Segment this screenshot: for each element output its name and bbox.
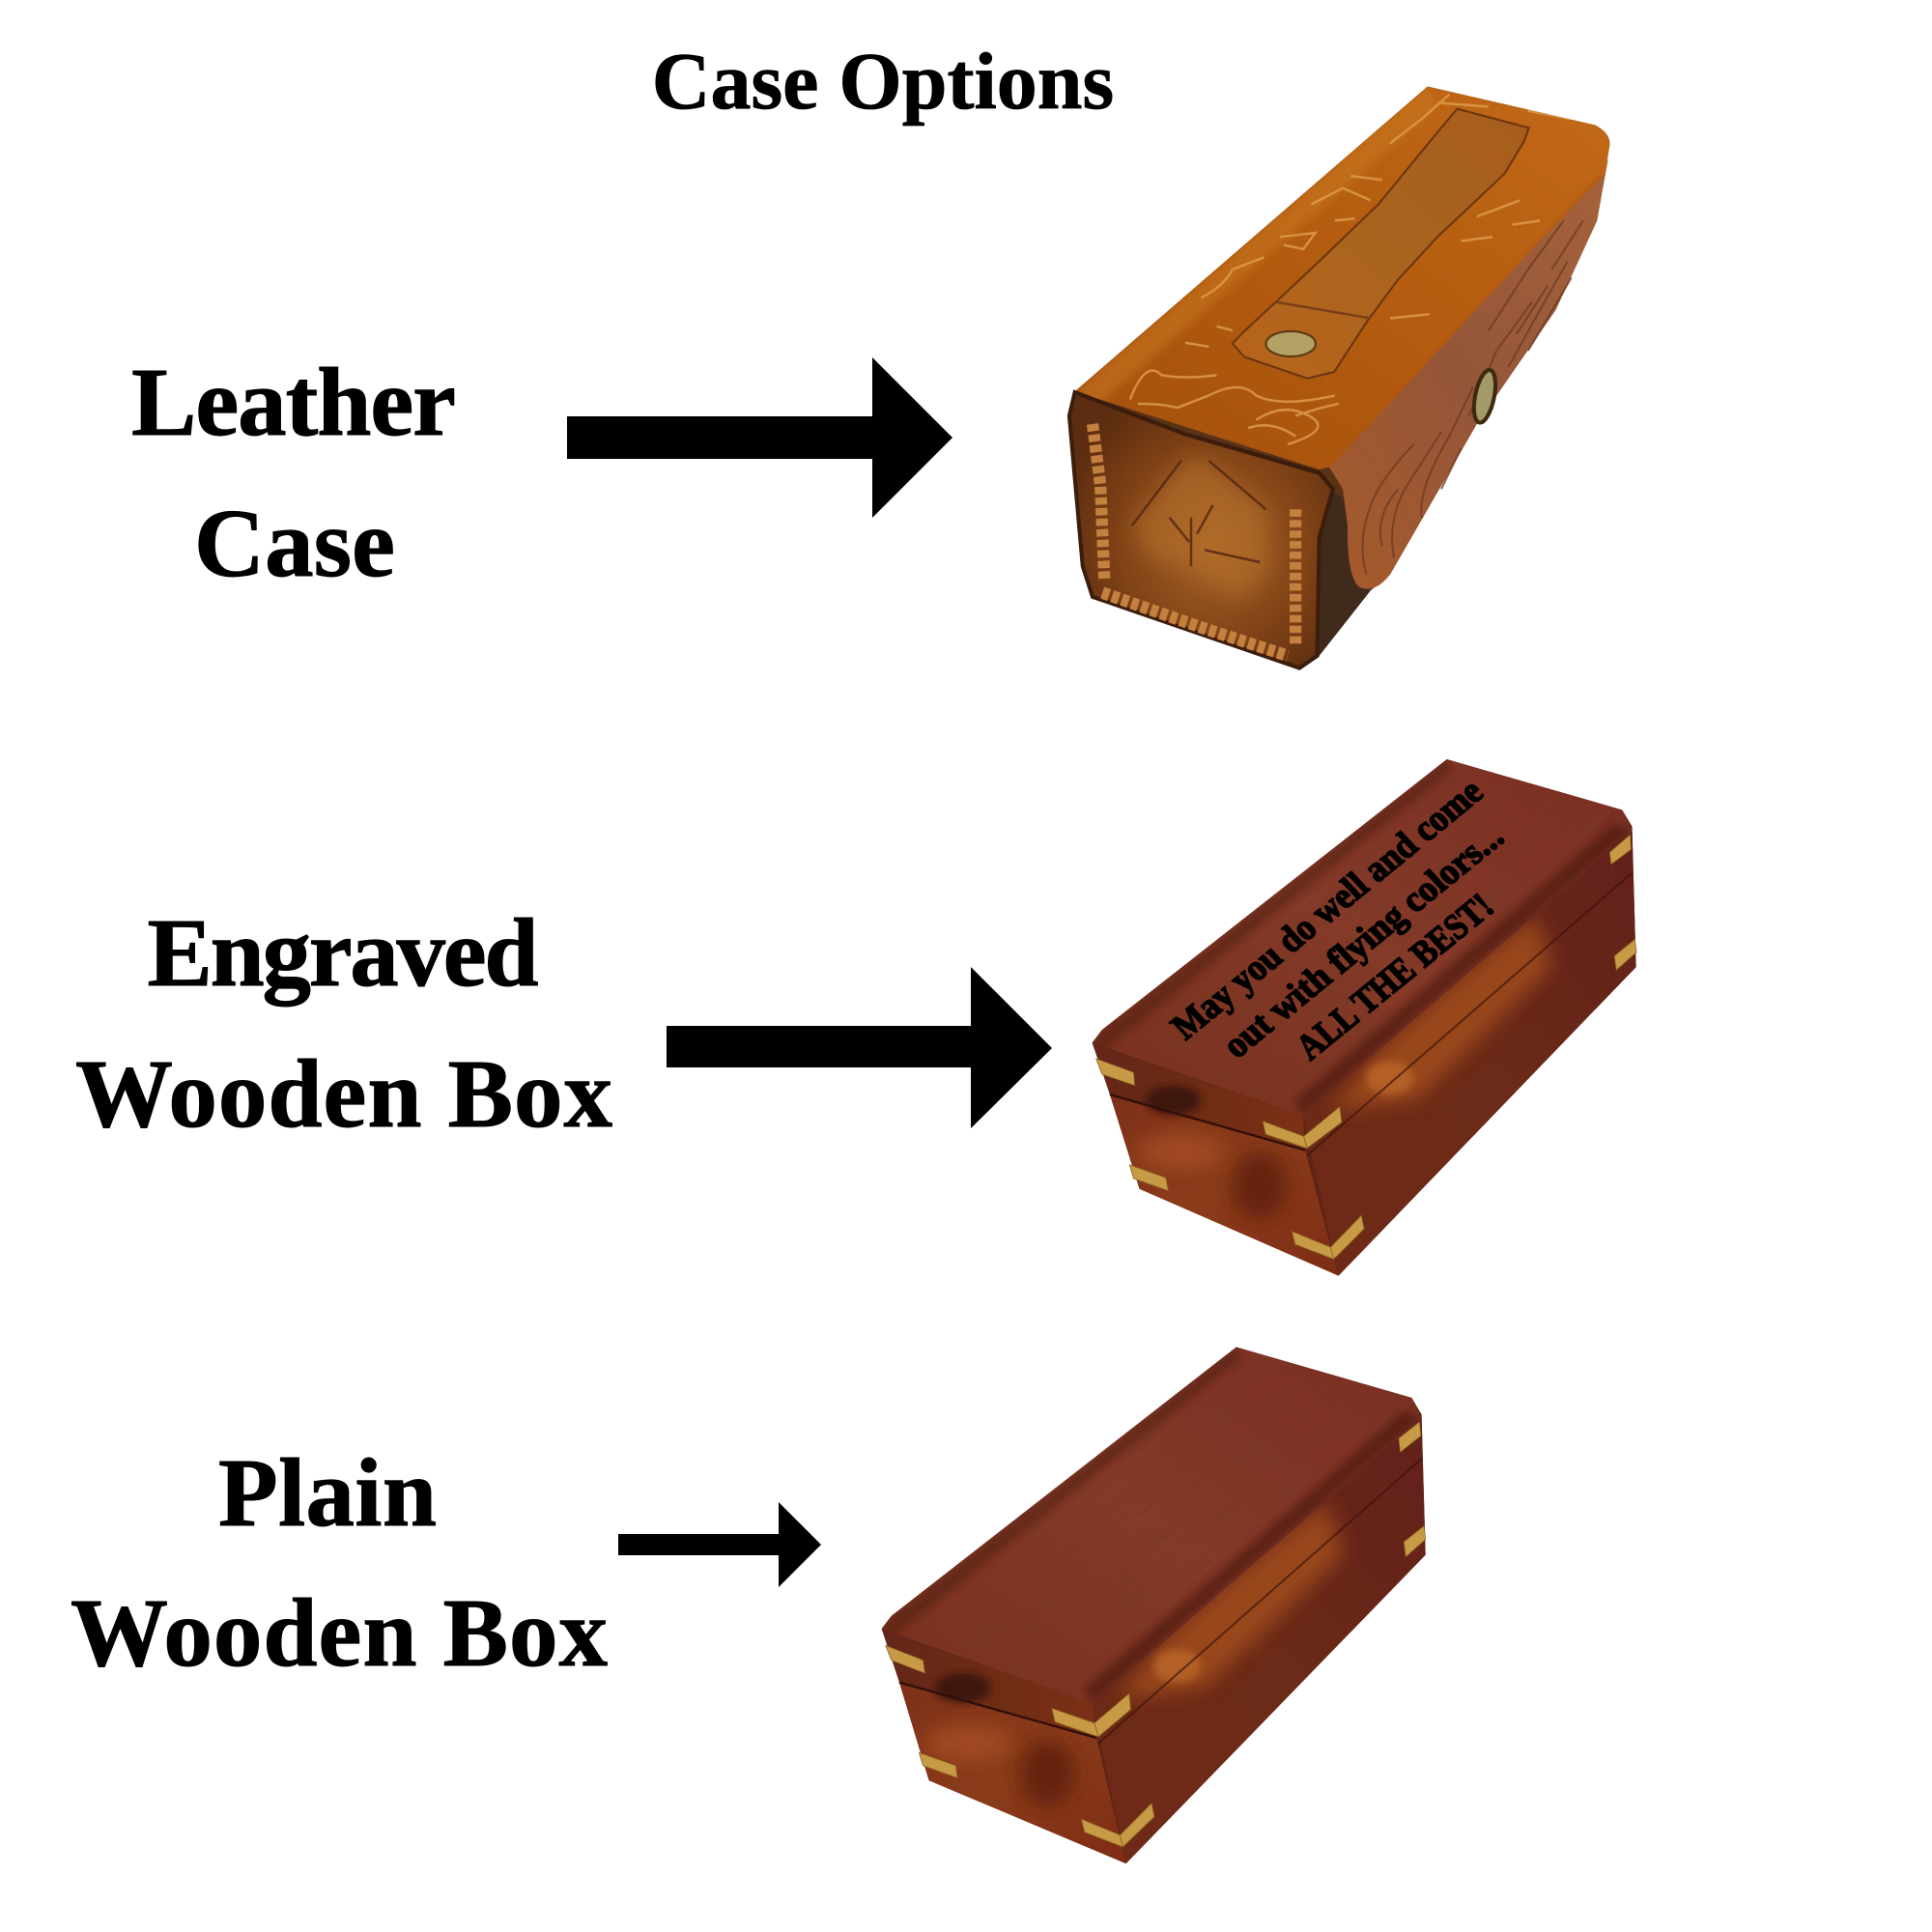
leather strap xyxy=(1233,109,1529,379)
label: plain wooden box: Wooden Box xyxy=(71,1578,608,1687)
side flap engraving xyxy=(1362,220,1583,575)
leather front face xyxy=(1069,392,1333,668)
engraved message: ALL THE BEST! xyxy=(1288,886,1502,1067)
side rivet xyxy=(1470,368,1499,425)
image: plain wooden box xyxy=(881,1347,1426,1864)
box silhouette backing xyxy=(1093,759,1636,1276)
top face shading and emboss xyxy=(1075,86,1606,472)
label: leather case: Leather xyxy=(131,348,456,456)
leather underside xyxy=(1299,477,1371,668)
box lid top xyxy=(882,1348,1422,1703)
box silhouette backing xyxy=(882,1348,1426,1863)
engraved message: out with flying colors... xyxy=(1214,816,1512,1065)
image: engraved wooden box xyxy=(1092,759,1636,1276)
image: leather case xyxy=(1069,86,1609,668)
front face tree emblem xyxy=(1132,461,1268,599)
brass corners xyxy=(1096,835,1636,1259)
strap rivet xyxy=(1266,331,1316,356)
brass corners xyxy=(886,1422,1426,1847)
engraved message: May you do well and come xyxy=(1163,771,1491,1047)
box front xyxy=(1110,1094,1339,1276)
arrow: leather case xyxy=(567,357,952,518)
label: engraved wooden box xyxy=(75,898,612,1148)
box right side xyxy=(1093,1418,1426,1863)
arrow: engraved wooden box xyxy=(667,967,1052,1128)
front face border tooling xyxy=(1093,424,1295,656)
strap stitching xyxy=(1276,302,1371,318)
leather side flap xyxy=(1329,159,1608,589)
label: leather case: Case xyxy=(194,489,395,597)
box front xyxy=(899,1683,1126,1863)
label: engraved wooden box: Wooden Box xyxy=(75,1039,612,1148)
box lid top xyxy=(1093,759,1633,1116)
label: engraved wooden box: Engraved xyxy=(147,898,539,1007)
title: Case Options xyxy=(652,37,1114,127)
label: leather case xyxy=(131,348,456,597)
label: plain wooden box: Plain xyxy=(218,1438,437,1547)
leather silhouette backing xyxy=(1069,86,1609,668)
label: plain wooden box xyxy=(71,1438,608,1687)
leather top face xyxy=(1075,86,1609,469)
box lid front xyxy=(884,1631,1096,1738)
box right side xyxy=(1303,831,1636,1276)
arrow: plain wooden box xyxy=(618,1502,821,1587)
box lid front xyxy=(1094,1044,1305,1151)
